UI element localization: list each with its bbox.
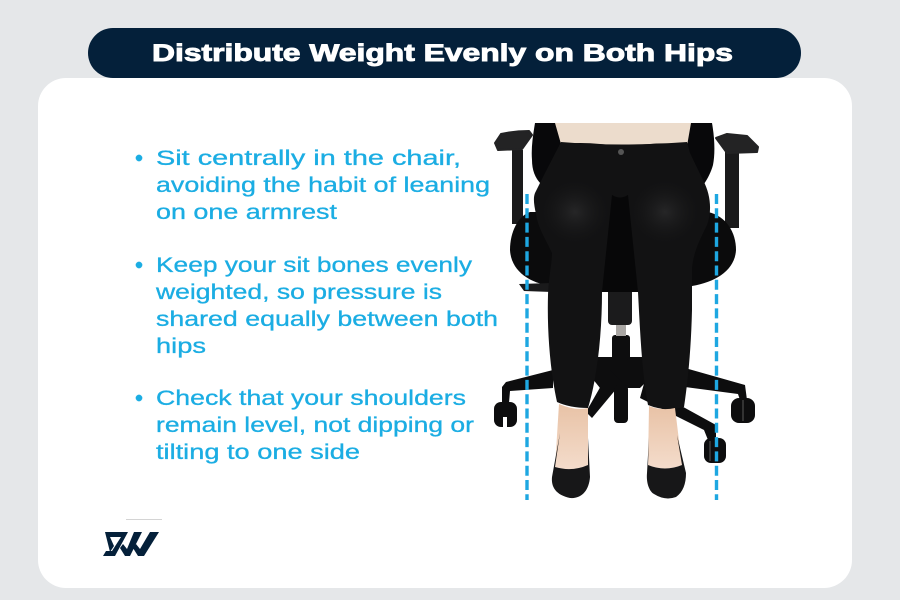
illustration: seated person on office chair	[494, 123, 758, 498]
text block: posture tips	[136, 147, 498, 464]
bullet: sit bones: shared equally between both	[156, 308, 498, 331]
bullet: shoulders: tilting to one side	[156, 441, 360, 464]
guide line: right hip	[715, 194, 718, 500]
bullet: sit centrally: on one armrest	[156, 201, 337, 224]
panel: main white card	[38, 78, 852, 588]
logo	[103, 519, 162, 556]
title banner: Distribute Weight Evenly on Both Hips	[152, 40, 733, 67]
bullet: shoulders: remain level, not dipping or	[156, 414, 474, 437]
icon: chair base	[494, 335, 755, 463]
bullet: sit bones	[136, 254, 498, 358]
bullet: shoulders	[136, 387, 474, 464]
caster front	[704, 438, 726, 463]
bullet: sit bones: hips	[156, 335, 206, 358]
bullet: shoulders: Check that your shoulders	[156, 387, 466, 410]
caster left	[494, 402, 517, 427]
caster right	[731, 398, 755, 423]
trousers	[534, 142, 710, 409]
bullet: sit centrally: Sit centrally in the chair,	[156, 147, 461, 170]
title banner	[88, 28, 801, 78]
legs and shoes	[552, 404, 686, 498]
icon: chair back and arms	[495, 123, 758, 228]
bullet: sit bones: weighted, so pressure is	[155, 281, 442, 304]
icon: chair seat	[510, 212, 736, 286]
shirt	[555, 123, 691, 146]
bullet: sit centrally: avoiding the habit of leaning	[156, 174, 490, 197]
bullet: sit bones: Keep your sit bones evenly	[156, 254, 473, 277]
bullet: sit centrally	[136, 147, 490, 224]
guide line: left hip	[525, 194, 529, 500]
